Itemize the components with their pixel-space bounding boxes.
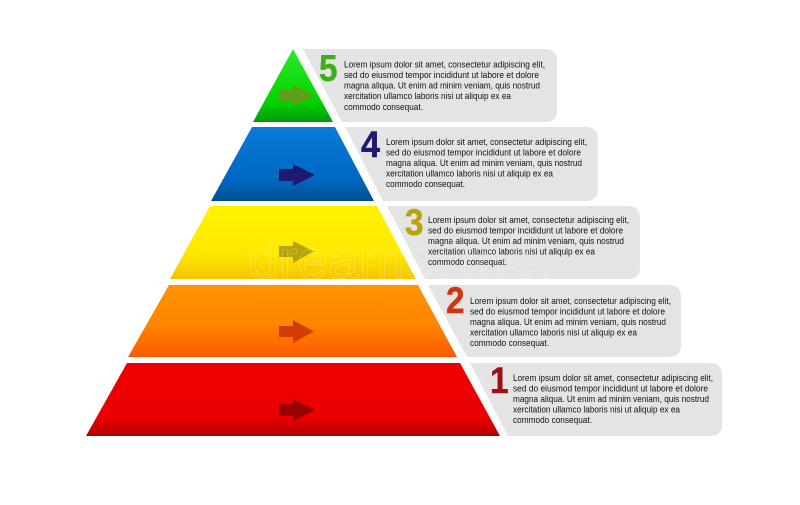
panel: level 2 (428, 280, 681, 357)
pyramid tier 2: orange (128, 285, 457, 357)
text: level 4 description: Lorem ipsum dolor sit amet, consectetur adipiscing elit, (386, 137, 587, 147)
text: level 1 description: commodo consequat. (513, 415, 592, 425)
text: level 1 description: Lorem ipsum dolor sit amet, consectetur adipiscing elit, (513, 373, 713, 383)
panel: level 3 (387, 202, 640, 279)
text: level 1 description (513, 373, 713, 425)
text: level 5 description: Lorem ipsum dolor sit amet, consectetur adipiscing elit, (344, 60, 545, 70)
text: level 2 description (470, 296, 671, 348)
number 3: 3 (405, 202, 424, 243)
panel: level 5 (303, 48, 557, 122)
text: level 3 description: Lorem ipsum dolor sit amet, consectetur adipiscing elit, (428, 215, 629, 225)
text: level 2 description: xercitation ullamco laboris nisi ut aliquip ex ea (470, 328, 637, 338)
text: level 3 description: sed do eiusmod tempor incididunt ut labore et dolore (428, 226, 623, 236)
text: level 1 description: magna aliqua. Ut enim ad minim veniam, quis nostrud (513, 394, 709, 404)
pyramid tier 1: red (86, 363, 500, 436)
pyramid tier 3: yellow (170, 206, 416, 279)
text: level 5 description: xercitation ullamco laboris nisi ut aliquip ex ea (344, 91, 511, 101)
arrow: dark orange (279, 320, 314, 343)
text: level 4 description: commodo consequat. (386, 179, 465, 189)
number 1: 1 (490, 360, 508, 401)
text: level 3 description: magna aliqua. Ut enim ad minim veniam, quis nostrud (428, 236, 624, 246)
text: level 2 description: magna aliqua. Ut enim ad minim veniam, quis nostrud (470, 317, 666, 327)
number 5: 5 (319, 48, 338, 89)
text: level 5 description: magna aliqua. Ut enim ad minim veniam, quis nostrud (344, 80, 540, 90)
text: level 3 description: xercitation ullamco laboris nisi ut aliquip ex ea (428, 246, 595, 256)
text: level 2 description: sed do eiusmod tempor incididunt ut labore et dolore (470, 306, 665, 316)
watermark: dreamstime. (248, 230, 553, 290)
text: level 4 description: sed do eiusmod tempor incididunt ut labore et dolore (386, 148, 581, 158)
text: level 4 description: xercitation ullamco laboris nisi ut aliquip ex ea (386, 168, 553, 178)
text: level 1 description: sed do eiusmod tempor incididunt ut labore et dolore (513, 384, 708, 394)
text: level 5 description: commodo consequat. (344, 102, 423, 112)
text: level 5 description (344, 60, 545, 112)
text: level 4 description (386, 137, 587, 189)
arrow: green (279, 85, 315, 106)
text: level 2 description: Lorem ipsum dolor sit amet, consectetur adipiscing elit, (470, 296, 671, 306)
text: level 4 description: magna aliqua. Ut enim ad minim veniam, quis nostrud (386, 158, 582, 168)
panel: level 1 (470, 360, 722, 436)
number 2: 2 (446, 280, 464, 321)
text: level 1 description: xercitation ullamco laboris nisi ut aliquip ex ea (513, 404, 680, 414)
pyramid tier 5: green (253, 49, 333, 122)
text: level 5 description: sed do eiusmod tempor incididunt ut labore et dolore (344, 70, 539, 80)
text: level 3 description: commodo consequat. (428, 257, 507, 267)
arrow: dark red (279, 399, 315, 421)
number 4: 4 (361, 124, 380, 165)
text: level 2 description: commodo consequat. (470, 338, 549, 348)
panel: level 4 (345, 124, 598, 201)
text: level 3 description (428, 215, 629, 267)
pyramid tier 4: blue (211, 127, 374, 201)
arrow: navy (279, 164, 315, 186)
arrow: olive (279, 241, 314, 263)
